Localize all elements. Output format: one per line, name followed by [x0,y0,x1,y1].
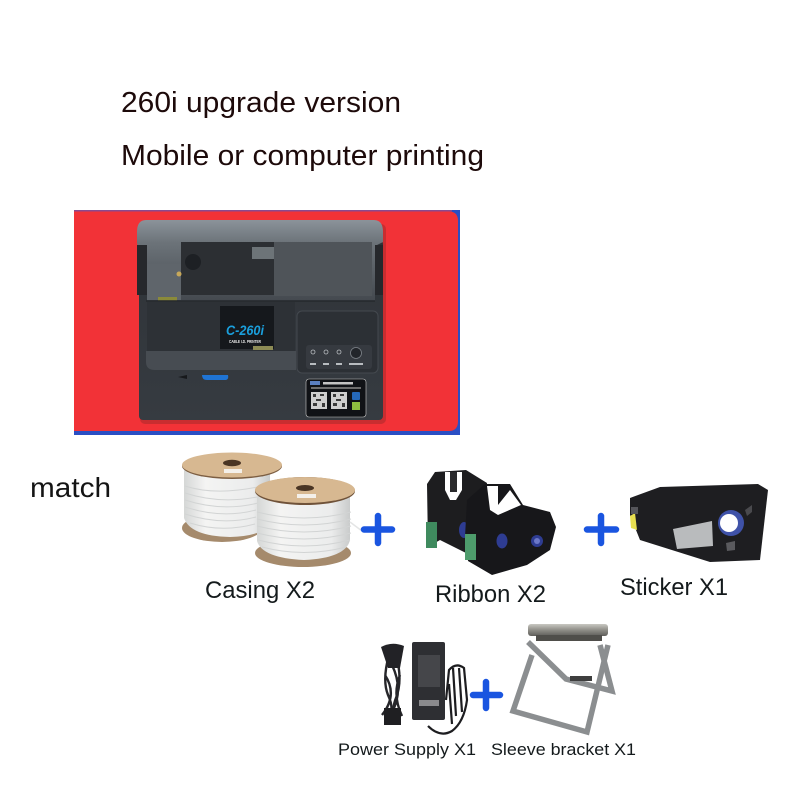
icon: printer [137,220,386,424]
icon: power supply [381,642,467,734]
title: 260i upgrade version: 260i upgrade version [121,87,401,119]
icon: plus 3 [473,682,500,708]
label: Power Supply X1: Power Supply X1 [338,740,476,759]
blue lever [202,375,228,380]
front ribbon cartridge [465,484,556,575]
label: Sticker X1: Sticker X1 [620,574,728,601]
back ribbon cartridge [427,470,487,560]
label: Ribbon X2: Ribbon X2 [435,581,546,608]
front spool [255,477,362,567]
panel: printer product photo [74,210,460,435]
QR code label [306,379,366,417]
icon: cable casing spools [182,452,362,567]
icon: ribbon cartridges [426,470,556,575]
control panel [297,311,378,373]
label: Casing X2: Casing X2 [205,577,315,604]
model badge C-260i: CABLE I.D. PRINTER [229,339,261,344]
model badge C-260i: C-260i [226,322,265,338]
icon: plus 2 [587,516,616,543]
power cord [382,655,402,724]
adapter body [412,642,445,720]
model badge C-260i [220,306,274,349]
label: Sleeve bracket X1: Sleeve bracket X1 [491,740,636,759]
back spool [182,452,282,542]
icon: sticker cartridge [630,484,768,562]
adapter cable [428,665,467,734]
icon: plus 1 [364,516,392,543]
subtitle: Mobile or computer printing: Mobile or computer printing [121,140,484,172]
icon: sleeve bracket [513,624,612,732]
label: match: match [30,472,111,503]
printer transparent lid [137,220,383,301]
